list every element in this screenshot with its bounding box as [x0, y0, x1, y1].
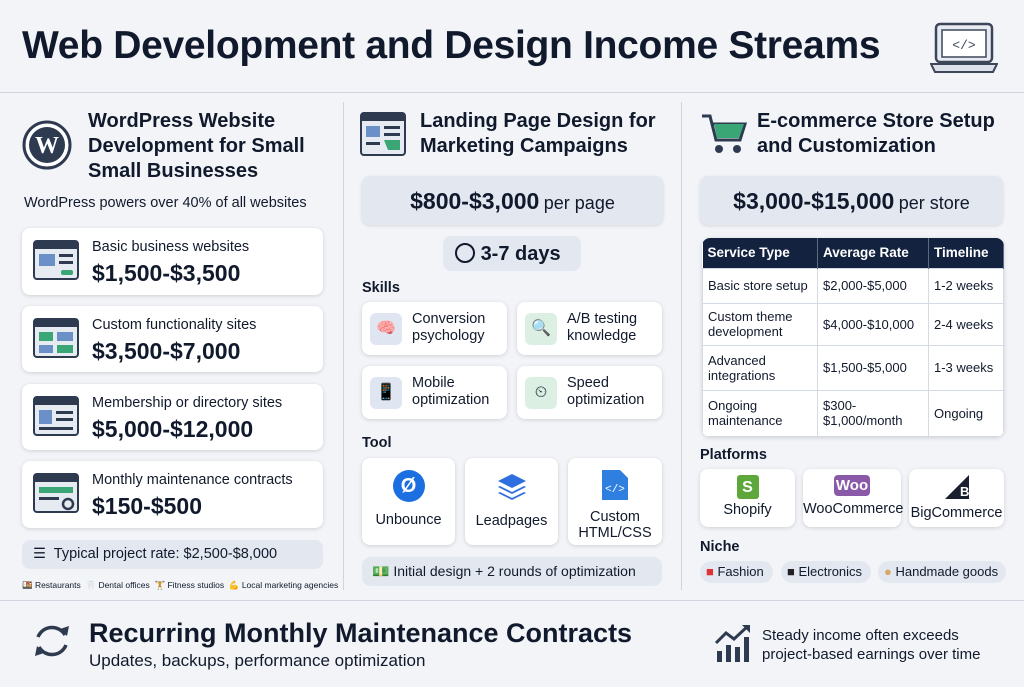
- price pill: [700, 176, 1003, 225]
- bottom pill: 💵 Initial design + 2 rounds of optimization: [372, 563, 636, 579]
- pricing table: Advanced integrations: [708, 352, 775, 382]
- skills grid: Mobile optimization: [412, 375, 489, 408]
- niche chips: ● Handmade goods: [884, 564, 998, 579]
- title: Web Development and Design Income Streams: [22, 24, 880, 67]
- skills grid: [360, 302, 664, 422]
- tools: Unbounce: [375, 512, 442, 528]
- skills heading: Skills: [362, 280, 400, 296]
- pricing table: Timeline: [934, 245, 989, 260]
- card: membership: Membership or directory sites: [92, 395, 282, 411]
- pricing table: Average Rate: [823, 245, 909, 260]
- icon: laptop code: [930, 22, 998, 73]
- price pill: [362, 176, 663, 225]
- tools: Leadpages: [476, 513, 547, 529]
- price pill: $3,000-$15,000 per store: [733, 188, 970, 214]
- pricing table: $1,000/month: [823, 413, 903, 428]
- tools: [360, 458, 664, 548]
- bottom pill: [362, 557, 662, 586]
- footer title: Recurring Monthly Maintenance Contracts: [89, 618, 632, 648]
- price pill: $800-$3,000 per page: [410, 188, 615, 214]
- platforms: [698, 468, 1006, 530]
- pricing table: Custom theme development: [708, 309, 793, 339]
- heading: WordPress Website Development for Small Small Businesses: [88, 110, 305, 182]
- pricing table: $300-: [823, 398, 856, 413]
- platforms: Shopify: [723, 502, 772, 518]
- footer: recurring contracts: [35, 618, 980, 670]
- icon: growth chart: [715, 624, 750, 662]
- icon: refresh: [35, 626, 69, 656]
- card: maintenance: Monthly maintenance contracts: [92, 472, 293, 488]
- pricing table: $1,500-$5,000: [823, 360, 907, 375]
- niche chips: ■ Electronics: [787, 564, 862, 579]
- card: maintenance: [22, 461, 323, 528]
- skills grid: ⏲: [535, 384, 547, 401]
- pricing table: $2,000-$5,000: [823, 278, 907, 293]
- footer note: Steady income often exceeds: [762, 627, 959, 644]
- pricing table: 1-2 weeks: [934, 278, 993, 293]
- panel: ecommerce: [698, 110, 1006, 583]
- niche heading: Niche: [700, 539, 740, 555]
- panel: wordpress: [20, 110, 338, 590]
- pricing table: Service Type: [708, 245, 790, 260]
- pricing table: Basic store setup: [708, 278, 808, 293]
- card: maintenance: $150-$500: [92, 493, 202, 519]
- pricing table: $4,000-$10,000: [823, 316, 914, 332]
- pill: typical rate: [22, 540, 323, 569]
- icon: landing page: [360, 112, 406, 156]
- card: custom: $3,500-$7,000: [92, 338, 240, 364]
- icon: cart: [702, 114, 747, 153]
- icon: wordpress: [22, 120, 72, 170]
- days pill: [443, 236, 581, 271]
- subtitle: WordPress powers over 40% of all websites: [24, 195, 307, 211]
- card: custom: [22, 306, 323, 372]
- platforms: S: [742, 479, 753, 496]
- heading: E-commerce Store Setup and Customization: [757, 110, 995, 157]
- platforms: WooCommerce: [803, 501, 903, 517]
- icon: wordpress: W: [35, 133, 59, 159]
- pricing table: 1-3 weeks: [934, 360, 993, 375]
- days pill: 3-7 days: [481, 243, 561, 265]
- platforms: B: [960, 484, 969, 499]
- card: membership: $5,000-$12,000: [92, 416, 253, 442]
- card: membership: [22, 384, 323, 450]
- skills grid: A/B testing knowledge: [567, 311, 637, 344]
- heading: Landing Page Design for Marketing Campaigns: [420, 110, 656, 157]
- card: basic: [22, 228, 323, 295]
- tools: Ø: [401, 475, 416, 497]
- card: basic: $1,500-$3,500: [92, 260, 240, 286]
- footer note: [762, 627, 980, 663]
- footer note: project-based earnings over time: [762, 646, 980, 663]
- platforms heading: Platforms: [700, 447, 767, 463]
- skills grid: 📱: [376, 384, 396, 401]
- tools: Custom HTML/CSS: [578, 509, 652, 541]
- pricing table: Ongoing maintenance: [708, 398, 782, 428]
- niche chips: [700, 561, 1006, 583]
- pricing table: Ongoing: [934, 406, 983, 420]
- skills grid: 🧠: [376, 320, 396, 337]
- card: custom: Custom functionality sites: [92, 317, 256, 333]
- skills grid: Conversion psychology: [412, 311, 485, 344]
- pricing table: 2-4 weeks: [934, 316, 993, 332]
- icon: laptop code: </>: [952, 38, 976, 53]
- footer subtitle: Updates, backups, performance optimization: [89, 651, 425, 670]
- skills grid: 🔍: [531, 320, 551, 337]
- platforms: Woo: [836, 477, 868, 494]
- pill: typical rate: ☰ Typical project rate: $2,500-$8,000: [33, 546, 277, 562]
- niche footnote: 🍱 Restaurants 🦷 Dental offices 🏋 Fitness studios 💪 Local marketing agencies: [22, 580, 338, 590]
- skills grid: Speed optimization: [567, 375, 644, 408]
- niche chips: ■ Fashion: [706, 564, 764, 579]
- pricing table: [702, 238, 1004, 436]
- tool heading: Tool: [362, 435, 392, 451]
- tools: </>: [605, 484, 625, 496]
- card: basic: Basic business websites: [92, 239, 249, 255]
- panel: landing page: [360, 110, 664, 586]
- platforms: BigCommerce: [911, 505, 1002, 521]
